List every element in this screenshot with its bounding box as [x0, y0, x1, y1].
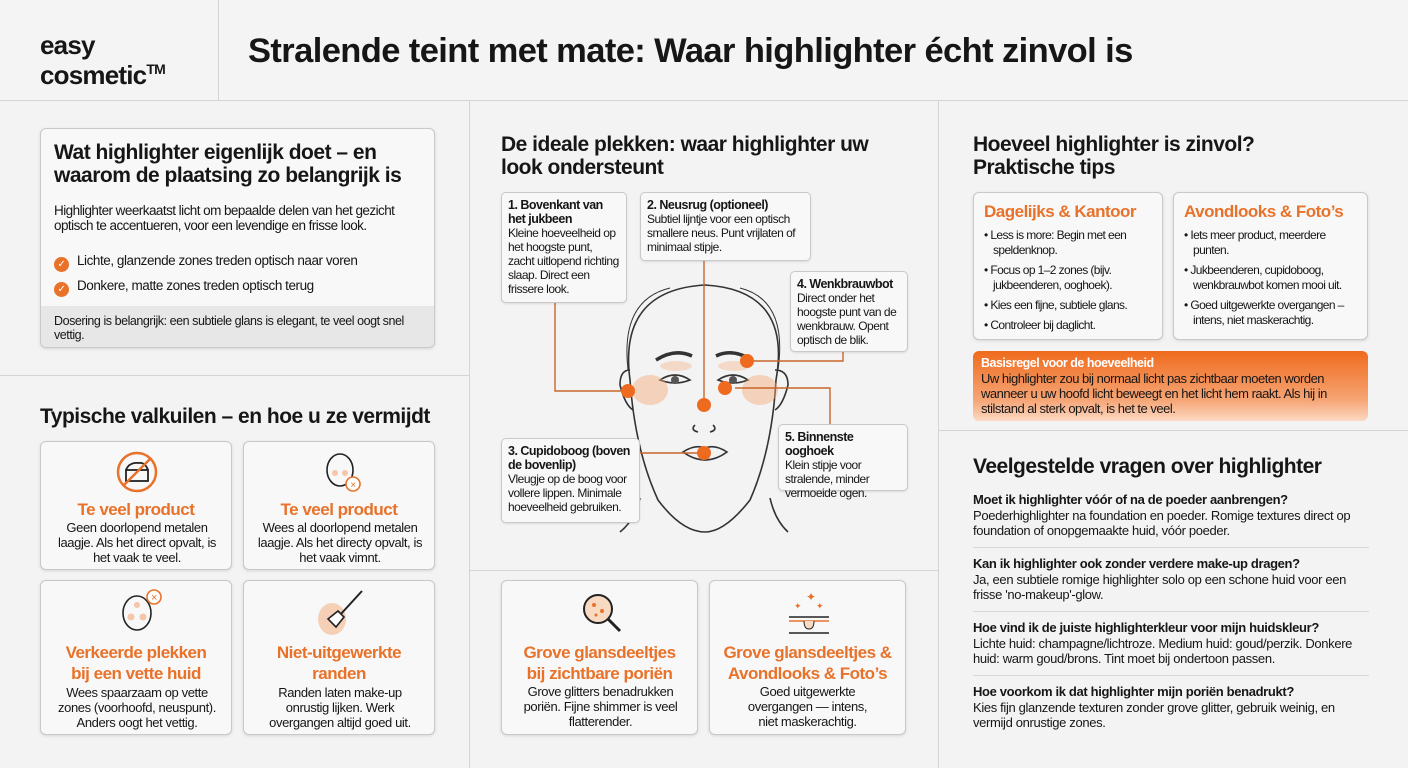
- callout 2: [640, 192, 811, 261]
- callout 1: [501, 192, 627, 303]
- card: verkeerde plekken: bij een vette huid: [71, 664, 201, 683]
- card: niet-uitgewerkte randen: [243, 580, 435, 735]
- FAQ list: Lichte huid: champagne/lichtroze. Medium huid: goud/perzik. Donkere huid: warm goud/brons. Tint moet bij ondertoon passen.: [973, 636, 1352, 666]
- title: Stralende teint met mate: Waar highlighter écht zinvol is: [248, 32, 1133, 70]
- card: te veel product 1: Geen doorlopend metalen laagje. Als het direct opvalt, is het vaak te veel.: [58, 520, 216, 565]
- callout: basisregel: [973, 351, 1368, 421]
- callout 3: Vleugje op de boog voor vollere lippen. Minimale hoeveelheid gebruiken.: [508, 472, 627, 514]
- heading: ideal spots: De ideale plekken: waar highlighter uw look ondersteunt: [501, 133, 868, 179]
- FAQ list: Poederhighlighter na foundation en poeder. Romige textures direct op foundation of onopgemaakte huid, vóór poeder.: [973, 508, 1350, 538]
- FAQ list: Moet ik highlighter vóór of na de poeder aanbrengen?: [973, 492, 1288, 507]
- FAQ list: Hoe voorkom ik dat highlighter mijn poriën benadrukt?: [973, 684, 1294, 699]
- callout 4: 4. Wenkbrauwbot: [797, 277, 893, 291]
- bullet list: [54, 253, 357, 297]
- heading: pitfalls: Typische valkuilen – en hoe u ze vermijdt: [40, 405, 430, 428]
- icon: skin sparkle: [789, 590, 829, 634]
- icon: skin sparkle: ✦: [794, 601, 802, 611]
- panel: what highlighter does: [40, 128, 435, 348]
- card: avond: Iets meer product, meerdere punten.: [1190, 228, 1326, 257]
- bullet list: Donkere, matte zones treden optisch terug: [77, 278, 314, 293]
- callout 5: Klein stipje voor stralende, minder vermoeide ogen.: [785, 458, 869, 500]
- icon: crossed jar: [116, 452, 158, 492]
- callout 2: 2. Neusrug (optioneel): [647, 198, 768, 212]
- card: dagelijks: [973, 192, 1163, 340]
- card: verkeerde plekken: Verkeerde plekken: [66, 643, 206, 662]
- card: avondlooks: overgangen — intens,: [748, 699, 867, 714]
- callout 2: Subtiel lijntje voor een optisch smallere neus. Punt vrijlaten of minimaal stipje.: [647, 212, 795, 254]
- card: avondlooks: Grove glansdeeltjes &: [723, 643, 892, 662]
- logo: cosmeticTM: [40, 60, 165, 90]
- card: niet-uitgewerkte randen: Randen laten make-up onrustig lijken. Werk overgangen altijd goed uit.: [269, 685, 411, 730]
- card: te veel product 2: Wees al doorlopend metalen laagje. Als het directy opvalt, is het vaak vimnt.: [258, 520, 422, 565]
- FAQ list: Kan ik highlighter ook zonder verdere make-up dragen?: [973, 556, 1300, 571]
- bullet list: Lichte, glanzende zones treden optisch naar voren: [77, 253, 357, 268]
- card: verkeerde plekken: [40, 580, 232, 735]
- heading: how much: Praktische tips: [973, 156, 1115, 179]
- callout 1: Kleine hoeveelheid op het hoogste punt, zacht uitlopend richting slaap. Direct een frissere look.: [508, 226, 619, 296]
- card: avondlooks: Avondlooks & Foto’s: [728, 664, 887, 683]
- bullet list: ✓: [58, 259, 65, 270]
- card: verkeerde plekken: Wees spaarzaam op vette zones (voorhoofd, neuspunt). Anders oogt het vettig.: [58, 685, 216, 730]
- FAQ list: Kies fijn glanzende texturen zonder grove glitter, gebruik weinig, en vermijd onrustige zones.: [973, 700, 1335, 730]
- heading: how much: [973, 133, 1254, 179]
- card: niet-uitgewerkte randen: randen: [312, 664, 366, 683]
- face diagram: [554, 261, 844, 533]
- callout 4: [790, 271, 908, 352]
- card: avondlooks: Goed uitgewerkte: [760, 684, 855, 699]
- icon: face oily: ×: [151, 592, 157, 604]
- card: grove glansdeeltjes: Grove glansdeeltjes: [523, 643, 676, 662]
- icon: face oily: [122, 589, 162, 631]
- card: te veel product 2: [243, 441, 435, 570]
- heading: how much: Hoeveel highlighter is zinvol?: [973, 133, 1254, 156]
- card: niet-uitgewerkte randen: Niet-uitgewerkte: [277, 643, 401, 662]
- bullet list: ✓: [58, 284, 65, 295]
- callout 1: 1. Bovenkant van het jukbeen: [508, 198, 603, 226]
- card: dagelijks: Controleer bij daglicht.: [990, 318, 1095, 332]
- icon: magnifier: [583, 594, 621, 632]
- callout 3: [501, 438, 640, 523]
- callout 4: Direct onder het hoogste punt van de wenkbrauw. Opent optisch de blik.: [797, 291, 896, 347]
- card: avond: Avondlooks & Foto’s: [1184, 202, 1343, 221]
- card: dagelijks: Dagelijks & Kantoor: [984, 202, 1136, 221]
- header: [0, 0, 1408, 101]
- icon: face with x: ×: [350, 480, 356, 491]
- card: avond: Goed uitgewerkte overgangen – intens, niet maskerachtig.: [1190, 298, 1344, 327]
- card: grove glansdeeltjes: bij zichtbare poriën: [527, 664, 672, 683]
- FAQ list: Hoe vind ik de juiste highlighterkleur voor mijn huidskleur?: [973, 620, 1319, 635]
- footer note: [41, 306, 436, 349]
- logo: easy: [40, 30, 95, 60]
- icon: face with x: [326, 453, 361, 492]
- icon: skin sparkle: ✦: [816, 601, 824, 611]
- FAQ list: Ja, een subtiele romige highlighter solo op een schone huid voor een frisse 'no-makeup'-glow.: [973, 572, 1346, 602]
- callout: basisregel: Basisregel voor de hoeveelheid: [981, 356, 1154, 370]
- callout: basisregel: Uw highlighter zou bij normaal licht pas zichtbaar moeten worden wanneer u uw hoofd licht beweegt en het licht hem raakt. Als hij in stilstand al sterk opvalt, is het te veel.: [981, 371, 1327, 416]
- card: dagelijks: Focus op 1–2 zones (bijv. jukbeenderen, ooghoek).: [990, 263, 1112, 292]
- heading: FAQ: Veelgestelde vragen over highlighter: [973, 455, 1321, 478]
- panel: what highlighter does: Wat highlighter eigenlijk doet – en waarom de plaatsing zo belangrijk is: [54, 141, 401, 187]
- card: grove glansdeeltjes: [501, 580, 698, 735]
- FAQ list: [973, 492, 1369, 730]
- card: te veel product 2: Te veel product: [281, 500, 397, 519]
- panel: what highlighter does: Highlighter weerkaatst licht om bepaalde delen van het gezicht optisch te accentueren, voor een levendige en frisse look.: [54, 203, 394, 233]
- card: avond: [1173, 192, 1368, 340]
- callout 3: 3. Cupidoboog (boven de bovenlip): [508, 444, 630, 472]
- card: dagelijks: Kies een fijne, subtiele glans.: [990, 298, 1127, 312]
- icon: brush: [318, 590, 363, 635]
- logo: [40, 30, 165, 90]
- footer note: Dosering is belangrijk: een subtiele glans is elegant, te veel oogt snel vettig.: [54, 314, 404, 342]
- card: dagelijks: Less is more: Begin met een speldenknop.: [990, 228, 1126, 257]
- icon: skin sparkle: ✦: [806, 590, 816, 604]
- callout 5: 5. Binnenste ooghoek: [785, 430, 853, 458]
- card: te veel product 1: [40, 441, 232, 570]
- card: te veel product 1: Te veel product: [78, 500, 194, 519]
- callout 5: [778, 424, 908, 491]
- card: avond: Jukbeenderen, cupidoboog, wenkbrauwbot komen mooi uit.: [1190, 263, 1342, 292]
- card: avondlooks: niet maskerachtig.: [758, 714, 857, 729]
- card: avondlooks: [709, 580, 906, 735]
- card: grove glansdeeltjes: Grove glitters benadrukken poriën. Fijne shimmer is veel flatterender.: [524, 684, 677, 729]
